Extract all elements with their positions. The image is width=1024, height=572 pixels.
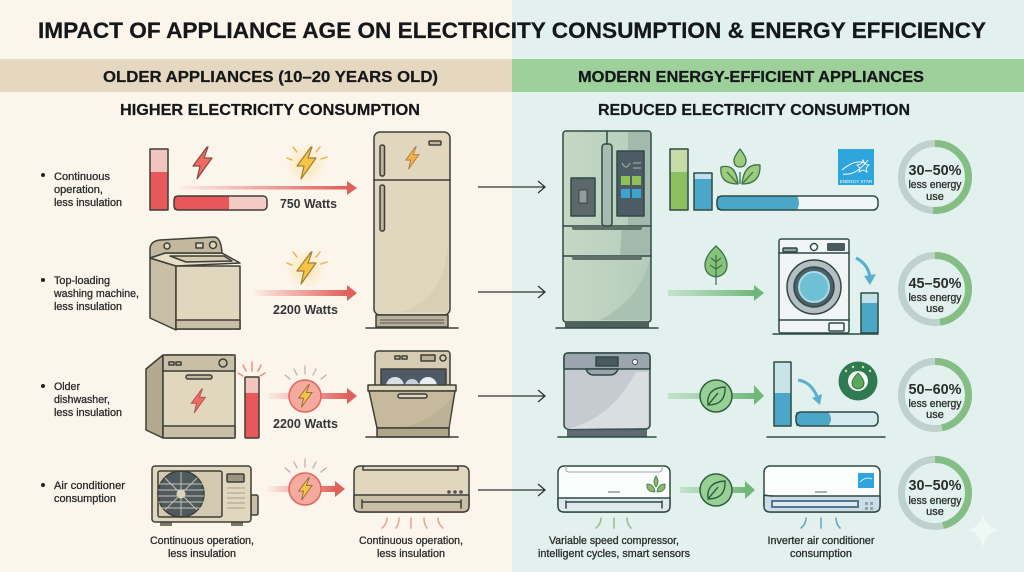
row 4 label: Air conditioner [54,480,125,492]
arrow: 750 watts [180,181,357,195]
arrow: row 4 old to new [478,484,545,496]
header band: modern appliances: MODERN ENERGY-EFFICIENT APPLIANCES [578,69,924,86]
ring: 45-50% [902,256,968,322]
row 4 label [41,480,125,505]
arrow with leaf circle, AC [680,474,755,506]
arrow: green row 2 [668,285,764,301]
ring: 50-60%: 50–60% [908,382,962,398]
ring: 30-50%: 30–50% [908,163,962,179]
right panel background [512,0,1024,572]
old fridge gauges [150,149,267,210]
header band: older appliances [0,59,512,92]
arrow with bolt circle, AC [268,459,345,505]
icon: energy star badge [838,149,874,185]
caption: variable speed compressor: Variable speed compressor, [549,535,679,547]
caption: inverter AC: Inverter air conditioner [768,535,875,547]
row 1 label: less insulation [54,197,122,209]
icon: sparkle watermark [966,513,1000,548]
ring: 50-60%: less energy [908,398,962,410]
icon: red bolt [193,147,212,179]
title: IMPACT OF APPLIANCE AGE ON ELECTRICITY CONSUMPTION & ENERGY EFFICIENCY [38,18,986,43]
old dishwasher open [366,351,458,437]
ring: 30-50%: use [926,191,944,203]
caption: outdoor unit [150,535,254,560]
row 2 label: Top-loading [54,275,110,287]
ring: 50-60%: use [926,409,944,421]
ring: 45-50%: 45–50% [908,276,962,292]
curved arrow and water bar: washer [856,258,878,333]
ring: 30-50% row 4: use [926,506,944,518]
caption: variable speed compressor [538,535,690,560]
modern indoor AC with leaf [558,466,670,528]
icon: plant [721,149,760,184]
modern front-load washer [773,239,878,334]
old dishwasher gauge [238,362,265,438]
row 3 label: dishwasher, [54,394,110,406]
row 3 label [41,381,122,419]
ring: 30-50% row 4 [902,460,968,526]
modern smart refrigerator [556,131,658,328]
old indoor AC unit [354,466,469,528]
icon: energy star badge: ENERGY STAR [840,179,873,184]
icon: leaf [705,246,727,285]
row 2 label [41,275,139,313]
caption: outdoor unit: Continuous operation, [150,535,254,547]
modern fridge gauges [670,149,878,210]
ring: 30-50% row 4: 30–50% [908,478,962,494]
header band: older appliances: OLDER APPLIANCES (10–20 YEARS OLD) [103,69,438,86]
row 1 label: operation, [54,184,103,196]
old top-loading washer [150,237,240,330]
old outdoor AC unit [152,466,258,526]
ring: 30-50% [902,144,968,210]
row 3 label: Older [54,381,80,393]
icon: yellow bolt with rays 2 [286,249,327,289]
row 1 label [41,171,122,209]
2200 watts label: 2200 Watts [273,303,338,317]
arrow: row 2 old to new [478,286,545,298]
icon: efficiency seal [838,362,878,400]
caption: outdoor unit: less insulation [168,548,236,560]
caption: indoor unit: less insulation [377,548,445,560]
row 4 label: consumption [54,493,116,505]
ring: 50-60% [902,362,968,428]
subheading: higher consumption: HIGHER ELECTRICITY CONSUMPTION [120,102,420,119]
750 watts label: 750 Watts [280,197,337,211]
arrow: row 3 old to new [478,390,545,402]
row 3 label: less insulation [54,407,122,419]
caption: inverter AC [768,535,875,560]
ring: 45-50%: use [926,303,944,315]
caption: inverter AC: consumption [790,548,852,560]
caption: indoor unit: Continuous operation, [359,535,463,547]
ring: 30-50%: less energy [908,179,962,191]
2200 watts label 2: 2200 Watts [273,417,338,431]
caption: variable speed compressor: intelligent cycles, smart sensors [538,548,690,560]
subheading: reduced consumption: REDUCED ELECTRICITY CONSUMPTION [598,102,910,119]
old refrigerator [366,132,458,328]
arrow with leaf circle, dishwasher [668,380,764,412]
arrow: row 1 old to new [478,181,545,193]
old dishwasher closed [146,355,235,438]
arrow with bolt circle, dishwasher [268,366,357,412]
header band: modern appliances [512,59,1024,92]
inverter indoor AC [764,466,880,528]
modern dishwasher [558,353,656,437]
row 2 label: less insulation [54,301,122,313]
row 1 label: Continuous [54,171,110,183]
icon: yellow bolt with rays [286,144,327,184]
caption: indoor unit [359,535,463,560]
modern dishwasher gauges [767,362,885,437]
ring: 30-50% row 4: less energy [908,495,962,507]
left panel background [0,0,512,572]
ring: 45-50%: less energy [908,292,962,304]
arrow: 2200 watts [255,285,357,301]
row 2 label: washing machine, [53,288,139,300]
